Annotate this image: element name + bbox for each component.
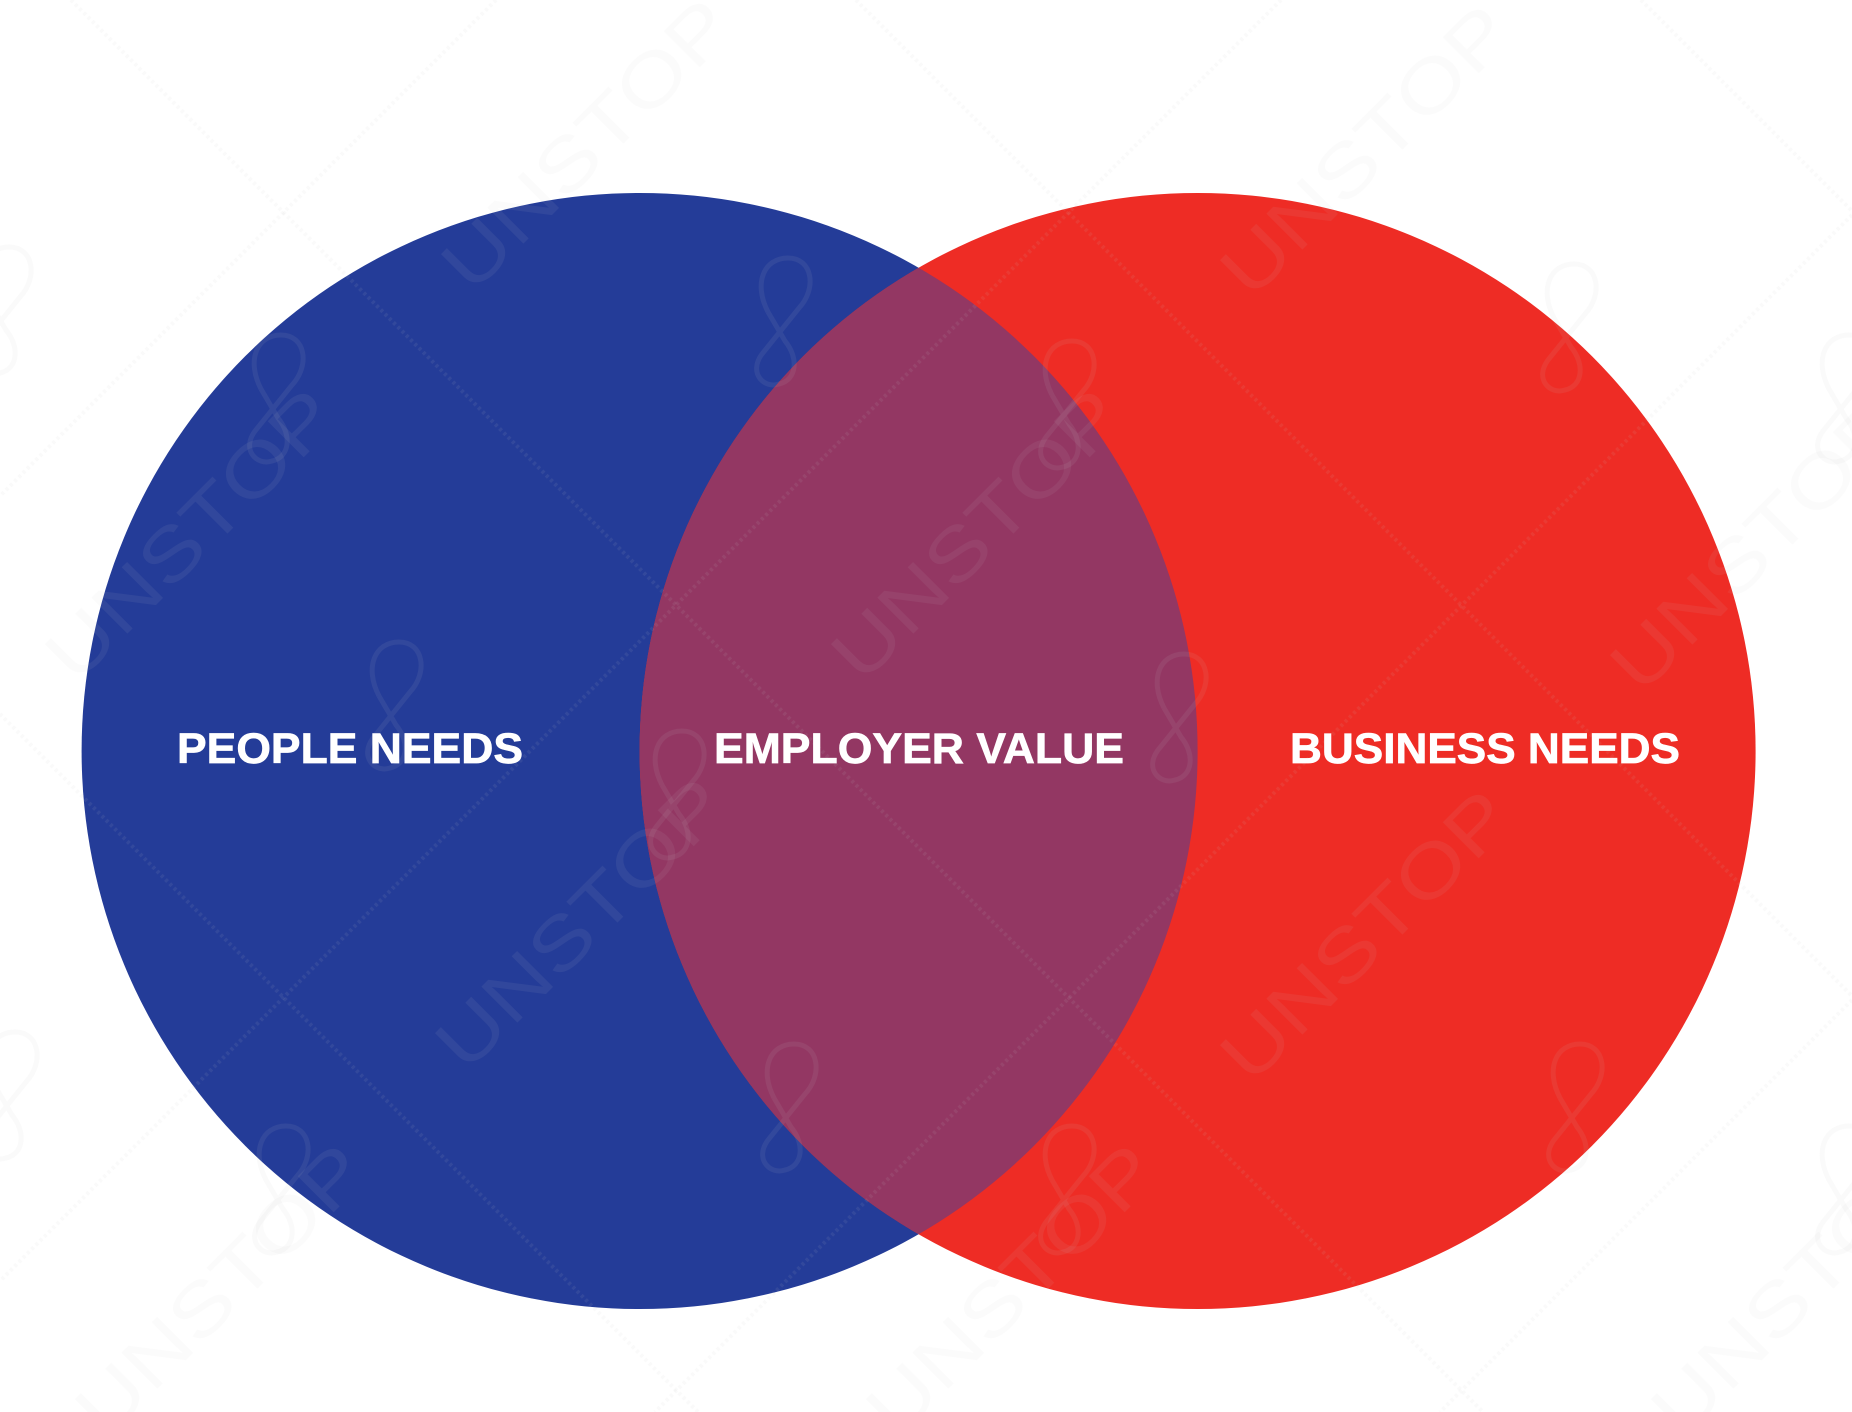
watermark pattern: UNSTOP bbox=[419, 761, 742, 1085]
label: employer value: EMPLOYER VALUE bbox=[714, 725, 1124, 773]
label: business needs: BUSINESS NEEDS bbox=[1290, 725, 1680, 773]
circle: business needs bbox=[640, 193, 1756, 1309]
overlap: employer value bbox=[640, 268, 1198, 1234]
watermark pattern: UNSTOP bbox=[815, 372, 1138, 696]
watermark pattern: UNSTOP bbox=[29, 372, 352, 696]
watermark pattern: UNSTOP bbox=[1204, 773, 1527, 1097]
watermark pattern: UNSTOP bbox=[425, 0, 748, 306]
watermark pattern: UNSTOP bbox=[1204, 0, 1527, 312]
label: people needs: PEOPLE NEEDS bbox=[177, 725, 523, 773]
circle: people needs bbox=[82, 193, 1198, 1309]
